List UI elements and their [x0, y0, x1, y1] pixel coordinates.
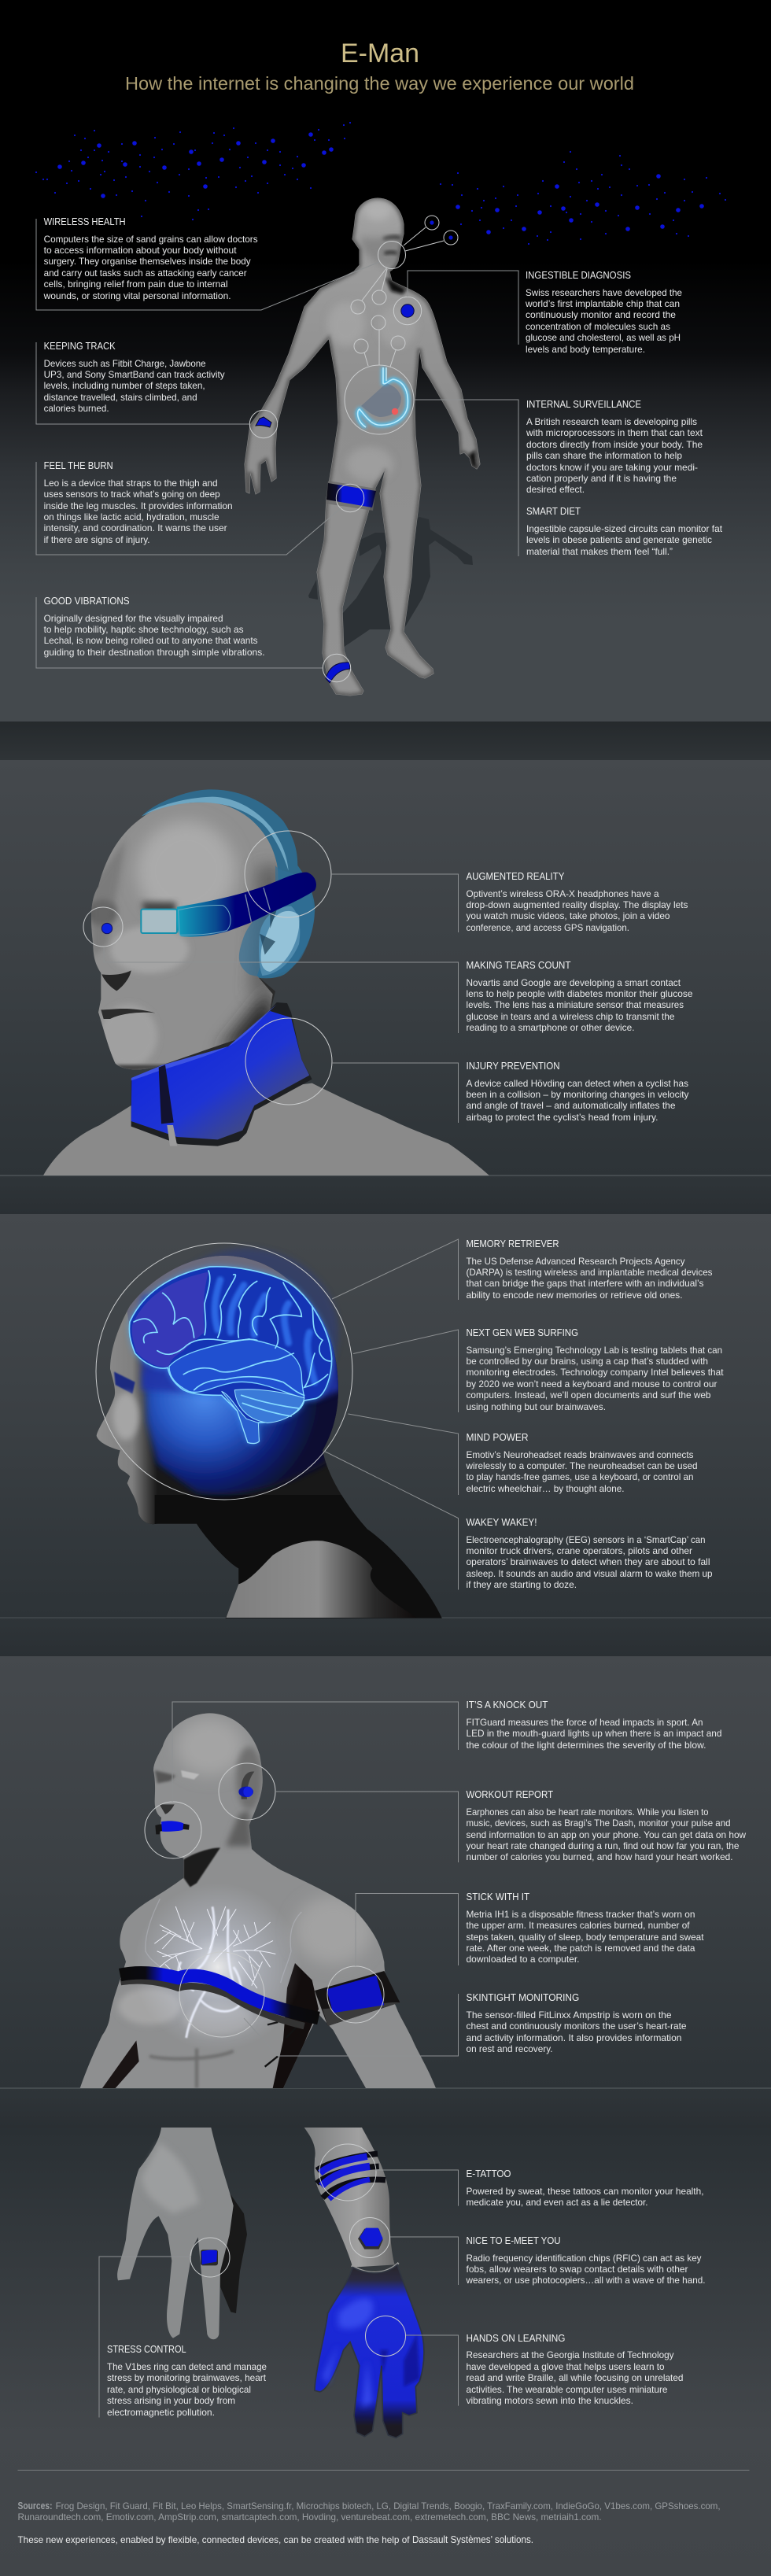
body text: Researchers at the Georgia Institute of Technology [466, 2350, 674, 2360]
body text: glucose in tears and a wireless chip to transmit the [466, 1012, 675, 1022]
body text: levels. The lens has a miniature sensor that measures [466, 1000, 684, 1010]
connector [415, 400, 518, 556]
connector [353, 1330, 458, 1412]
body text: to help mobility, haptic shoe technology, such as [44, 625, 244, 635]
cerebellum [234, 1389, 304, 1423]
heading: NICE TO E-MEET YOU [466, 2235, 560, 2246]
callout: mind power [348, 1414, 697, 1495]
body shading [102, 1718, 372, 2088]
headphone highlight band [142, 797, 289, 871]
figure: hands with wearables [117, 2128, 424, 2438]
body text: intensity, and coordination. It warns the user [44, 523, 227, 533]
connector [99, 2257, 191, 2417]
temporal lobe [169, 1339, 304, 1398]
body text: Emotiv’s Neuroheadset reads brainwaves and connects [466, 1450, 694, 1460]
smart diet body [526, 524, 723, 557]
heading: FEEL THE BURN [44, 460, 113, 471]
glove shine [323, 2298, 373, 2408]
body text: fobs, allow wearers to swap contact details with other [466, 2264, 688, 2275]
body text [44, 478, 233, 545]
callout circles: upper body [145, 1763, 384, 2037]
body text: (DARPA) is testing wireless and implantable medical devices [466, 1268, 713, 1278]
body text: wounds, or storing vital personal information. [43, 291, 231, 301]
footer divider [17, 2470, 749, 2471]
body text: A British research team is developing pills [526, 417, 697, 427]
callout: workout report [276, 1789, 747, 1862]
body text: conference, and access GPS navigation. [466, 923, 629, 933]
body text: on things like lactic acid, hydration, muscle [44, 512, 219, 522]
heart and lung glow [134, 1883, 301, 2051]
body text: number of calories you burned, and how hard your heart worked. [466, 1852, 733, 1862]
glove [315, 2264, 424, 2438]
body text: Lechal, is now being rolled out to anyone that wants [44, 636, 258, 646]
body text: desired effect. [526, 485, 585, 495]
body text: activities. The wearable computer uses miniature [466, 2385, 667, 2395]
body text [466, 1079, 689, 1123]
sources [17, 2500, 721, 2522]
small implant dots [430, 220, 453, 240]
smart contact lens [101, 923, 113, 934]
body text [107, 2362, 267, 2418]
connector [332, 1063, 458, 1123]
body text: with microprocessors in them that can text [526, 428, 703, 438]
callout circles: head [83, 831, 332, 1105]
body text: Swiss researchers have developed the [526, 288, 682, 298]
body text: The US Defense Advanced Research Projects Agency [466, 1257, 685, 1267]
stomach illustration [358, 367, 408, 427]
body text: stress by monitoring brainwaves, heart [107, 2373, 267, 2383]
body text: to access information about your body without [44, 245, 237, 256]
nose [101, 970, 131, 991]
body text: cells, bringing relief from pain due to internal [44, 279, 228, 290]
ring [201, 2249, 218, 2265]
body text: have developed a glove that helps users learn to [466, 2362, 664, 2372]
body text: rate, and physiological or biological [107, 2385, 251, 2395]
callout: good vibrations [36, 596, 323, 668]
sources list continued: Runaroundtech.com, Emotiv.com, AmpStrip.com, smartcaptech.com, Hovding, venturebeat.com, extremetech.com, BBC News, metriaih1.com. [17, 2512, 601, 2522]
heading: INGESTIBLE DIAGNOSIS [526, 270, 631, 281]
body text: glucose and cholesterol, as well as pH [526, 333, 681, 343]
heading: WAKEY WAKEY! [466, 1517, 537, 1528]
headphone translucent side [239, 865, 314, 976]
ear under headphone [259, 906, 300, 976]
body text: Earphones can also be heart rate monitors. While you listen to [466, 1807, 708, 1818]
body text: music, devices, such as Bragi’s The Dash, monitor your pulse and [466, 1818, 730, 1829]
body text [466, 1535, 713, 1590]
heading: INJURY PREVENTION [466, 1061, 560, 1072]
body text [44, 359, 225, 414]
body text: drop-down augmented reality display. The display lets [466, 900, 688, 910]
body text: uses sensors to track what’s going on deep [44, 489, 220, 500]
heading: IT’S A KNOCK OUT [466, 1699, 548, 1711]
body text [466, 2350, 683, 2406]
head interior [111, 1256, 442, 1618]
callout: skintight monitoring [244, 1992, 686, 2056]
title: E-Man [341, 39, 419, 68]
body text: operators’ brainwaves to detect when they are about to fall [466, 1557, 710, 1567]
body text: wearers, or use photocopiers…all with a wave of the hand. [465, 2275, 705, 2286]
left hand shadow [218, 2187, 247, 2313]
body text: levels and body temperature. [526, 345, 645, 355]
blue particle cloud [35, 122, 726, 245]
body text: Leo is a device that straps to the thigh and [44, 478, 218, 489]
heading: KEEPING TRACK [44, 341, 116, 352]
callout: internal surveillance and smart diet [415, 399, 723, 557]
connector [331, 874, 458, 932]
closing statement: Dassault Systèmes’ solutions. [412, 2534, 533, 2545]
callout: hands on learning [406, 2333, 683, 2406]
brain glow [129, 1267, 332, 1443]
smart diet body: Ingestible capsule-sized circuits can monitor fat [526, 524, 723, 534]
body text [465, 2253, 705, 2286]
closing statement: These new experiences, enabled by flexible, connected devices, can be created with the help of [17, 2535, 410, 2545]
headphone band [142, 789, 315, 978]
body text: vibrating motors sewn into the knuckles. [466, 2396, 633, 2406]
connector [324, 1451, 458, 1589]
torso silhouette [80, 1713, 436, 2088]
brain stem [222, 1391, 259, 1443]
body text: monitor truck drivers, crane operators, pilots and other [466, 1546, 692, 1556]
callout: it's a knock out [172, 1699, 722, 1802]
rfid chip [358, 2228, 383, 2249]
body text: doctors directly from inside your body. The [526, 440, 703, 450]
callout: keeping track [36, 341, 249, 424]
body text [465, 1450, 697, 1494]
body text [466, 1910, 704, 1965]
connector [406, 2335, 458, 2406]
callout: making tears count [104, 947, 692, 1033]
heading: NEXT GEN WEB SURFING [466, 1327, 578, 1338]
body text: wirelessly to a computer. The neuroheadset can be used [465, 1461, 697, 1471]
shoulders [43, 1083, 489, 1175]
knuckle shadow [380, 2334, 419, 2386]
heading: HANDS ON LEARNING [466, 2333, 565, 2344]
body text: UP3, and Sony SmartBand can track activity [44, 370, 225, 380]
callout: memory retriever [332, 1238, 713, 1301]
figure: full body man [245, 198, 480, 696]
heading: STICK WITH IT [466, 1891, 529, 1902]
connector [36, 597, 323, 668]
body text: you watch music videos, take photos, join a video [466, 911, 670, 921]
mouth [101, 1009, 155, 1019]
gyri highlights [189, 1280, 315, 1382]
callout circle: brain [96, 1243, 352, 1500]
body text [525, 288, 682, 355]
body text: and activity information. It also provides information [466, 2033, 681, 2043]
callout: ingestible diagnosis [408, 270, 682, 355]
body text: Novartis and Google are developing a smart contact [466, 978, 681, 988]
display lens [141, 910, 177, 933]
body text [43, 234, 258, 301]
body text: medicate you, and even act as a lie detector. [466, 2198, 648, 2208]
body text: electromagnetic pollution. [107, 2408, 215, 2418]
airbag collar [131, 1002, 312, 1146]
display arm [176, 873, 316, 937]
body text: world’s first implantable chip that can [525, 299, 680, 309]
mouth guard [155, 1821, 190, 1834]
body text: reading to a smartphone or other device. [466, 1023, 634, 1033]
heading: INTERNAL SURVEILLANCE [526, 399, 641, 410]
body text [466, 1257, 713, 1301]
body text: chest and continuously monitors the user’s heart-rate [466, 2021, 686, 2032]
body text [466, 1718, 722, 1751]
body text: computers. Instead, we’ll open documents and surf the web [466, 1390, 711, 1401]
body text [466, 2010, 686, 2054]
body text: send information to an app on your phone. You can get data on how [466, 1830, 747, 1840]
body text: The sensor-filled FitLinxx Ampstrip is worn on the [466, 2010, 672, 2021]
body text: surgery. They organise themselves inside the body [44, 256, 251, 267]
sub-heading: smart diet: SMART DIET [526, 506, 581, 517]
connector [36, 342, 249, 424]
connector [244, 1994, 458, 2056]
left hand highlight [142, 2142, 199, 2213]
body text: cation properly and if it is having the [526, 474, 677, 484]
heading: WIRELESS HEALTH [44, 216, 126, 227]
body text: the upper arm. It measures calories burned, number of [466, 1921, 690, 1931]
e-tattoo [317, 2153, 386, 2199]
body text [466, 2187, 703, 2208]
closing statement [17, 2534, 533, 2545]
body text: steps taken, quality of sleep, body temperature and sweat [466, 1932, 704, 1943]
connector [172, 1702, 458, 1802]
body text: Optivent’s wireless ORA-X headphones have a [466, 889, 659, 899]
body text: LED in the mouth-guard lights up when there is an impact and [466, 1729, 722, 1739]
callout: stick with it [356, 1891, 704, 1966]
body text: on rest and recovery. [466, 2044, 552, 2054]
body text: Computers the size of sand grains can allow doctors [44, 234, 258, 245]
body text: monitoring electrodes. Technology company Intel believes that [466, 1367, 724, 1378]
body text: continuously monitor and record the [526, 310, 676, 320]
callout: feel the burn [36, 460, 341, 555]
body text: Samsung’s Emerging Technology Lab is testing tablets that can [466, 1345, 722, 1356]
body text: distance travelled, stairs climbed, and [44, 393, 197, 403]
heading: AUGMENTED REALITY [466, 871, 565, 882]
body text [466, 978, 692, 1033]
body text: FITGuard measures the force of head impacts in sport. An [466, 1718, 703, 1728]
gap between arm and torso [283, 2014, 366, 2088]
head silhouette [97, 1256, 442, 1618]
body text: asleep. It sounds an audio and visual alarm to wake them up [466, 1569, 713, 1579]
ear [242, 1771, 254, 1799]
glove cuff [352, 2263, 399, 2272]
brain [129, 1267, 332, 1443]
halo [155, 1249, 338, 1416]
callout circles and links [249, 216, 458, 682]
body text [466, 1345, 724, 1412]
body text: Originally designed for the visually impaired [44, 614, 223, 624]
callout: injury prevention [332, 1061, 689, 1123]
sources label: Sources: [17, 2500, 52, 2511]
body text: Radio frequency identification chips (RFIC) can act as key [466, 2253, 702, 2264]
connector [36, 462, 341, 555]
body text: and angle of travel – and automatically inflates the [466, 1101, 675, 1111]
callout: wakey wakey [324, 1451, 713, 1590]
body text: stress arising in your body from [107, 2396, 235, 2406]
body text: your heart rate changed during a run, find out how far you ran, the [466, 1841, 740, 1851]
body text: airbag to protect the cyclist’s head from injury. [466, 1113, 658, 1123]
body text: concentration of molecules such as [526, 322, 670, 332]
body silhouette [245, 198, 480, 696]
neck [163, 976, 291, 1123]
callout: nice to e-meet you [390, 2235, 705, 2286]
heading: MAKING TEARS COUNT [466, 960, 571, 971]
smart diet body: levels in obese patients and generate genetic [526, 535, 712, 545]
connector [375, 2170, 458, 2206]
head shading [88, 821, 283, 1072]
body text: inside the leg muscles. It provides information [44, 501, 233, 511]
floor shadow [308, 517, 473, 649]
left hand [117, 2128, 234, 2339]
body text: A device called Hövding can detect when a cyclist has [466, 1079, 688, 1089]
body text: read and write Braille, all while focusing on unrelated [466, 2373, 683, 2383]
body text: rate. After one week, the patch is removed and the data [466, 1943, 695, 1954]
body text: been in a collision – by monitoring changes in velocity [466, 1090, 689, 1100]
callout: stress control [99, 2257, 267, 2418]
body text: if there are signs of injury. [44, 535, 150, 545]
callout: wireless health [36, 216, 379, 310]
body text: Devices such as Fitbit Charge, Jawbone [44, 359, 206, 369]
body text: be controlled by our brains, using a cap that’s studded with [466, 1356, 708, 1367]
thigh band [326, 481, 376, 511]
body text: the colour of the light determines the severity of the blow. [466, 1740, 706, 1751]
subtitle: How the internet is changing the way we experience our world [125, 73, 634, 94]
body text: using nothing but our brainwaves. [466, 1402, 606, 1412]
sources list: Frog Design, Fit Guard, Fit Bit, Leo Helps, SmartSensing.fr, Microchips biotech, LG, Digital Trends, Boogio, TraxFamily.com, IndieGoGo, V1bes.com, GPSshoes.com, [56, 2501, 721, 2511]
body text: downloaded to a computer. [466, 1954, 579, 1965]
body text: electric wheelchair… by thought alone. [466, 1484, 625, 1494]
body text: Electroencephalography (EEG) sensors in a ‘SmartCap’ can [466, 1535, 705, 1545]
body text: by 2020 we won’t need a keyboard and mouse to control our [466, 1379, 718, 1389]
connector [276, 1792, 458, 1862]
body text: to play hands-free games, use a keyboard, or control an [466, 1472, 694, 1482]
nose [160, 1804, 175, 1814]
body text: The V1bes ring can detect and manage [107, 2362, 267, 2372]
connector [390, 2237, 458, 2285]
heading: E-TATTOO [466, 2168, 511, 2179]
body text: guiding to their destination through simple vibrations. [44, 648, 265, 658]
body text [466, 889, 688, 933]
heading: STRESS CONTROL [107, 2344, 186, 2355]
connector [408, 271, 518, 345]
body text: Powered by sweat, these tattoos can monitor your health, [466, 2187, 703, 2197]
callout circles: hands [190, 2144, 406, 2356]
heading: WORKOUT REPORT [466, 1789, 553, 1800]
body text [44, 614, 265, 658]
arm band [315, 1971, 400, 2026]
heading: MIND POWER [466, 1432, 529, 1443]
connector [332, 1239, 458, 1300]
ankle band [326, 662, 350, 683]
connector [348, 1414, 458, 1495]
chest strap [120, 1973, 319, 2026]
heading: GOOD VIBRATIONS [44, 596, 130, 607]
heading: SKINTIGHT MONITORING [466, 1992, 579, 2003]
frontal lobe [132, 1272, 208, 1367]
shoulder [226, 1541, 417, 1618]
body text: doctors know if you are taking your medi- [526, 463, 698, 473]
callout: e-tattoo [375, 2168, 703, 2208]
forearm [304, 2128, 395, 2268]
body text: pills can share the information to help [526, 451, 682, 461]
heading: MEMORY RETRIEVER [466, 1238, 559, 1249]
folds [134, 1271, 330, 1416]
callout: next gen web surfing [353, 1327, 724, 1412]
connector [36, 219, 379, 310]
earbud [238, 1787, 253, 1797]
body text: levels, including number of steps taken, [44, 381, 205, 391]
smart diet body: material that makes them feel “full.” [526, 547, 673, 557]
body text: lens to help people with diabetes monitor their glucose [466, 989, 692, 999]
wrist band [256, 417, 271, 427]
body text: and carry out tasks such as attacking early cancer [44, 268, 247, 279]
brain body [129, 1267, 332, 1443]
body text: Metria IH1 is a disposable fitness tracker that’s worn on [466, 1910, 695, 1920]
figure: upper body with fitness devices [80, 1713, 436, 2088]
callout: augmented reality [331, 871, 688, 933]
body text: that can bridge the gaps that interfere with an individual’s [466, 1279, 704, 1289]
body text [526, 417, 703, 495]
body text: calories burned. [44, 404, 109, 414]
body text [466, 1807, 747, 1862]
connector [104, 947, 458, 1033]
connector [356, 1893, 458, 1966]
body text: ability to encode new memories or retrieve old ones. [466, 1290, 683, 1301]
figure: head with glowing brain [96, 1247, 442, 1618]
head [91, 803, 278, 1069]
body text: if they are starting to doze. [466, 1580, 577, 1590]
figure: head with wearables [43, 789, 489, 1175]
chest sensor [401, 304, 414, 317]
body shading [245, 198, 480, 696]
